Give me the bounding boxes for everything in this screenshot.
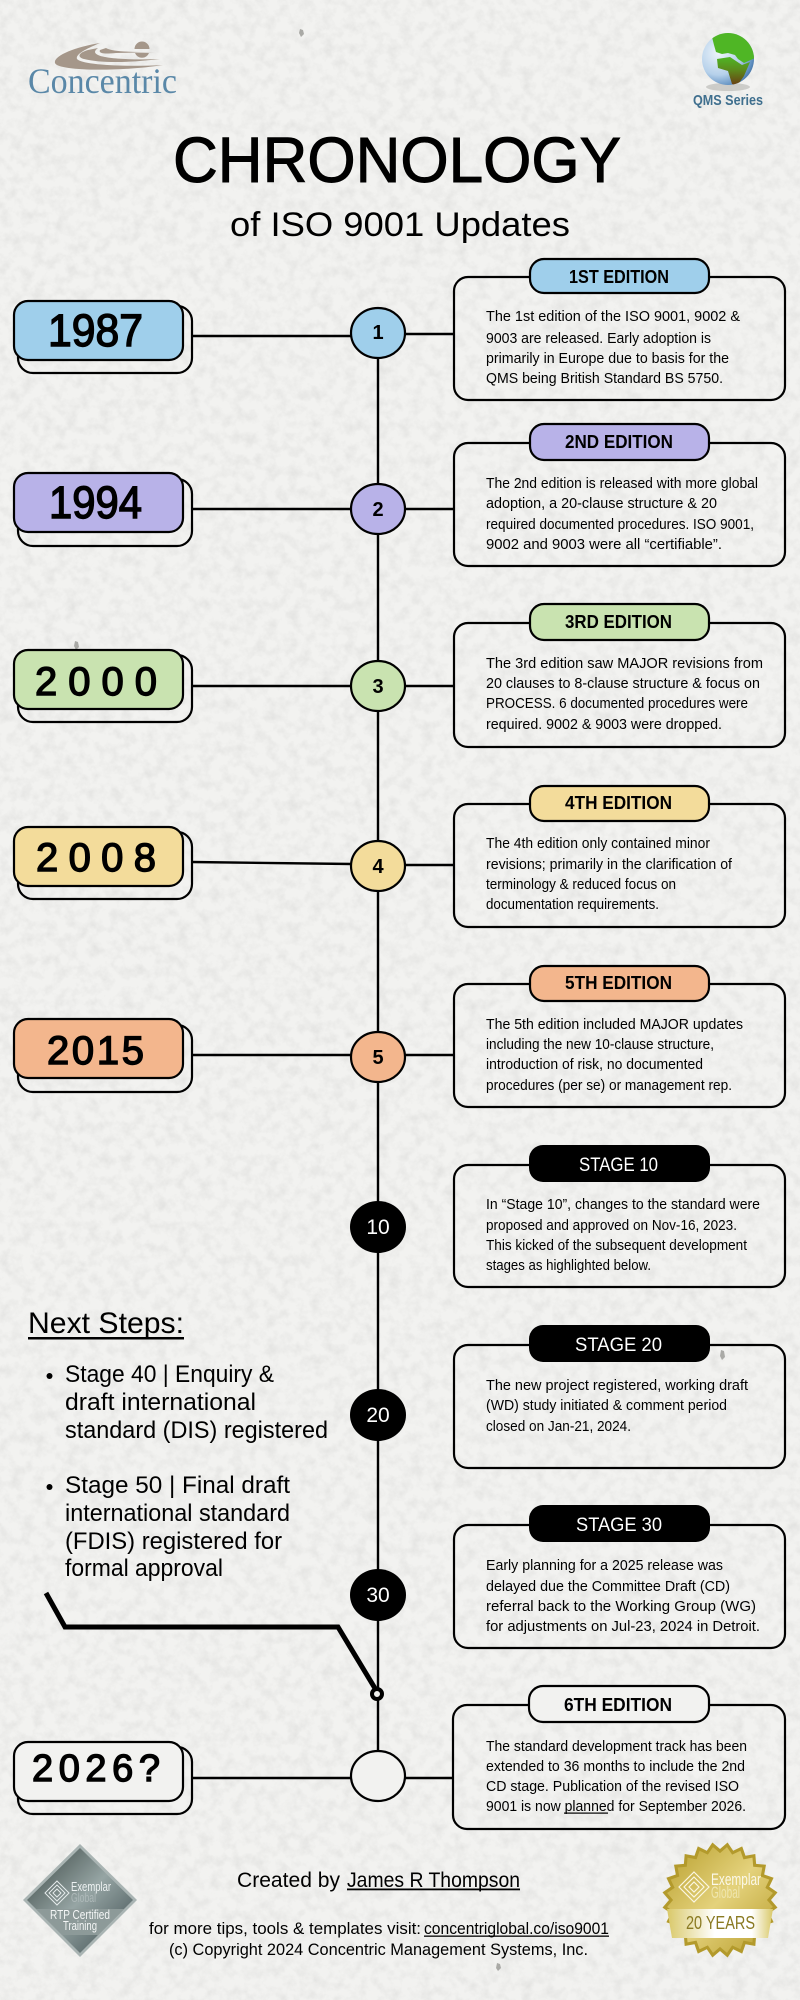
text: stage 10: stages as highlighted below. bbox=[486, 1257, 651, 1274]
bullet: stage 50: Stage 50 | Final draft bbox=[65, 1472, 290, 1499]
pill: 6th edition: 6TH EDITION bbox=[564, 1695, 672, 1715]
text: stage 30: for adjustments on Jul-23, 2024 in Detroit. bbox=[486, 1618, 760, 1635]
pill: 3rd edition: 3RD EDITION bbox=[565, 612, 672, 632]
node stage 20 bbox=[350, 1389, 406, 1441]
node 3: 3 bbox=[372, 676, 384, 698]
text: stage 20 bbox=[486, 1377, 749, 1435]
bullet: stage 40: draft international bbox=[65, 1389, 256, 1416]
pill: stage 30 bbox=[529, 1505, 710, 1542]
text: stage 30 bbox=[486, 1557, 760, 1635]
list: next steps bbox=[46, 1361, 328, 1582]
footer: website link bbox=[149, 1919, 609, 1938]
text: 1st edition bbox=[486, 308, 740, 387]
year badge: 2008 bbox=[14, 827, 192, 899]
pill: 1st edition: 1ST EDITION bbox=[569, 267, 669, 287]
node stage 30: 30 bbox=[366, 1584, 390, 1607]
text: 6th edition: The standard development track has been bbox=[486, 1738, 747, 1755]
pill: 6th edition bbox=[529, 1686, 709, 1722]
node stage 10 bbox=[350, 1201, 406, 1253]
badge: Exemplar Global 20 Years: 20 YEARS bbox=[686, 1913, 755, 1933]
text: 4th edition: documentation requirements. bbox=[486, 896, 659, 913]
bullet: stage 50 bbox=[46, 1472, 290, 1582]
logo wordmark: Concentric bbox=[28, 61, 177, 101]
pill: 5th edition bbox=[530, 966, 709, 1001]
text: stage 10: proposed and approved on Nov-16, 2023. bbox=[486, 1217, 737, 1234]
text: stage 20: The new project registered, working draft bbox=[486, 1377, 749, 1394]
text: 1st edition: The 1st edition of the ISO 9001, 9002 & bbox=[486, 308, 740, 325]
text: 6th edition: 9001 is now planned for September 2026. bbox=[486, 1798, 746, 1815]
badge: Exemplar Global 20 Years: Exemplar bbox=[711, 1870, 761, 1889]
text: 3rd edition bbox=[486, 655, 763, 733]
panel: 6th edition bbox=[453, 1686, 785, 1829]
pill: stage 20: STAGE 20 bbox=[575, 1335, 662, 1356]
panel: stage 30 bbox=[454, 1505, 785, 1648]
node 2: 2 bbox=[372, 499, 384, 521]
year badge: 2015 bbox=[14, 1019, 192, 1092]
bullet: stage 50: (FDIS) registered for bbox=[65, 1528, 282, 1555]
text: 4th edition: revisions; primarily in the clarification of bbox=[486, 856, 733, 873]
footer: website link: concentriglobal.co/iso9001 bbox=[424, 1919, 609, 1938]
text: 6th edition bbox=[486, 1738, 747, 1815]
text: 1st edition: primarily in Europe due to basis for the bbox=[486, 350, 729, 367]
badge: Exemplar Global RTP Certified Training bbox=[23, 1844, 137, 1957]
pill: 4th edition: 4TH EDITION bbox=[565, 793, 672, 813]
year badge: 1994 bbox=[14, 473, 192, 546]
node stage 30 bbox=[350, 1569, 406, 1621]
footer: copyright: (c) Copyright 2024 Concentric Management Systems, Inc. bbox=[169, 1940, 588, 1959]
year badge: 2015: 2015 bbox=[47, 1029, 144, 1073]
pill: 5th edition: 5TH EDITION bbox=[565, 973, 672, 993]
node 2 bbox=[351, 484, 405, 534]
credit line: James R Thompson bbox=[347, 1869, 520, 1892]
credit line bbox=[237, 1869, 520, 1892]
panel: 5th edition bbox=[454, 966, 785, 1107]
node stage 10: 10 bbox=[366, 1216, 390, 1239]
node 1 bbox=[351, 308, 405, 358]
timeline spine bbox=[377, 340, 379, 1755]
panel: stage 10 bbox=[454, 1145, 785, 1287]
pill: 3rd edition bbox=[530, 604, 709, 640]
connector: 2000 to 3rd edition bbox=[192, 685, 454, 687]
text: 3rd edition: 20 clauses to 8-clause structure & focus on bbox=[486, 675, 760, 692]
bullet: stage 40: standard (DIS) registered bbox=[65, 1417, 328, 1444]
text: 5th edition: The 5th edition included MAJOR updates bbox=[486, 1016, 743, 1033]
connector: 1987 to 1st edition bbox=[192, 334, 454, 336]
node 4 bbox=[351, 841, 405, 891]
title: CHRONOLOGY bbox=[173, 124, 621, 196]
year badge: 2000: 2000 bbox=[35, 660, 157, 704]
panel: 1st edition bbox=[454, 259, 785, 400]
text: stage 10: This kicked of the subsequent development bbox=[486, 1237, 748, 1254]
text: 6th edition: CD stage. Publication of the revised ISO bbox=[486, 1778, 739, 1795]
year badge: 2026?: 2026? bbox=[32, 1748, 160, 1790]
text: stage 10: In “Stage 10”, changes to the standard were bbox=[486, 1196, 760, 1213]
text: 2nd edition: adoption, a 20-clause structure & 20 bbox=[486, 495, 717, 512]
year badge: 1994: 1994 bbox=[49, 477, 142, 528]
text: 1st edition: 9003 are released. Early adoption is bbox=[486, 330, 711, 347]
text: stage 30: delayed due the Committee Draft (CD) bbox=[486, 1578, 730, 1595]
subtitle: of ISO 9001 Updates bbox=[230, 206, 570, 244]
text: 2nd edition bbox=[486, 475, 758, 553]
heading: Next Steps: Next Steps: bbox=[28, 1307, 184, 1340]
badge: Exemplar Global 20 Years bbox=[662, 1842, 778, 1958]
logo swoosh mark bbox=[55, 42, 163, 70]
bullet: stage 50: international standard bbox=[65, 1500, 290, 1527]
connector: 2008 to 4th edition bbox=[192, 862, 454, 865]
text: 5th edition: including the new 10-clause structure, bbox=[486, 1036, 714, 1053]
text: 4th edition bbox=[486, 835, 733, 913]
text: 2nd edition: required documented procedures. ISO 9001, bbox=[486, 516, 754, 533]
badge: Exemplar Global RTP Certified Training: RTP Certified bbox=[50, 1907, 110, 1922]
year badge: 1987: 1987 bbox=[48, 305, 143, 356]
pill: stage 30: STAGE 30 bbox=[576, 1515, 662, 1536]
connector: 1994 to 2nd edition bbox=[192, 508, 454, 510]
text: 5th edition bbox=[486, 1016, 743, 1094]
node 5: 5 bbox=[372, 1047, 384, 1069]
badge: Exemplar Global RTP Certified Training: Training bbox=[63, 1918, 97, 1933]
text: 2nd edition: The 2nd edition is released with more global bbox=[486, 475, 758, 492]
panel: 3rd edition bbox=[454, 604, 785, 747]
node 1: 1 bbox=[372, 322, 384, 344]
text: 4th edition: The 4th edition only contained minor bbox=[486, 835, 710, 852]
connector: 2015 to 5th edition bbox=[192, 1054, 454, 1056]
year badge: 1987 bbox=[14, 301, 192, 373]
badge: Exemplar Global RTP Certified Training: Exemplar bbox=[71, 1879, 111, 1894]
text: stage 30: referral back to the Working Group (WG) bbox=[486, 1598, 756, 1615]
pill: stage 10: STAGE 10 bbox=[579, 1155, 658, 1176]
pill: 2nd edition: 2ND EDITION bbox=[565, 432, 673, 452]
text: 5th edition: introduction of risk, no documented bbox=[486, 1056, 703, 1073]
year badge: 2008: 2008 bbox=[36, 836, 156, 880]
pill: 4th edition bbox=[530, 786, 709, 821]
connector: 2026 to 6th edition bbox=[192, 1777, 454, 1779]
icon: QMS Series globe bbox=[693, 31, 763, 109]
footer: website link: for more tips, tools & templates visit: bbox=[149, 1919, 421, 1938]
badge: Exemplar Global RTP Certified Training: Global bbox=[71, 1890, 96, 1905]
text: stage 10 bbox=[486, 1196, 760, 1274]
pill: 1st edition bbox=[530, 259, 709, 293]
panel: stage 20 bbox=[454, 1325, 785, 1468]
text: stage 30: Early planning for a 2025 release was bbox=[486, 1557, 723, 1574]
credit line: Created by bbox=[237, 1869, 340, 1892]
text: 1st edition: QMS being British Standard BS 5750. bbox=[486, 370, 723, 387]
bullet: stage 40 bbox=[46, 1361, 328, 1444]
node 5 bbox=[351, 1032, 405, 1082]
text: 4th edition: terminology & reduced focus on bbox=[486, 876, 676, 893]
node 6th edition bbox=[351, 1751, 405, 1801]
pill: stage 10 bbox=[529, 1145, 710, 1182]
text: 2nd edition: 9002 and 9003 were all “certifiable”. bbox=[486, 536, 722, 553]
text: 3rd edition: The 3rd edition saw MAJOR revisions from bbox=[486, 655, 763, 672]
text: 5th edition: procedures (per se) or management rep. bbox=[486, 1077, 732, 1094]
year badge: 2000 bbox=[14, 650, 192, 722]
logo: Concentric bbox=[28, 42, 177, 101]
pill: stage 20 bbox=[529, 1325, 710, 1362]
badge: Exemplar Global 20 Years: Global bbox=[711, 1883, 740, 1902]
panel: 2nd edition bbox=[454, 424, 785, 566]
year badge: 2026? bbox=[14, 1742, 192, 1814]
pill: 2nd edition bbox=[530, 424, 709, 460]
text: stage 20: closed on Jan-21, 2024. bbox=[486, 1418, 631, 1435]
text: 3rd edition: required. 9002 & 9003 were dropped. bbox=[486, 716, 722, 733]
label: QMS Series: QMS Series bbox=[693, 92, 763, 109]
text: 6th edition: extended to 36 months to include the 2nd bbox=[486, 1758, 745, 1775]
bullet: stage 50: formal approval bbox=[65, 1555, 223, 1582]
text: stage 20: (WD) study initiated & comment period bbox=[486, 1397, 727, 1414]
text: 3rd edition: PROCESS. 6 documented procedures were bbox=[486, 695, 748, 712]
node stage 20: 20 bbox=[366, 1404, 390, 1427]
node 4: 4 bbox=[372, 856, 384, 878]
arrow: next steps to timeline bbox=[46, 1593, 382, 1699]
node 3 bbox=[351, 661, 405, 711]
bullet: stage 40: Stage 40 | Enquiry & bbox=[65, 1361, 274, 1388]
panel: 4th edition bbox=[454, 786, 785, 927]
